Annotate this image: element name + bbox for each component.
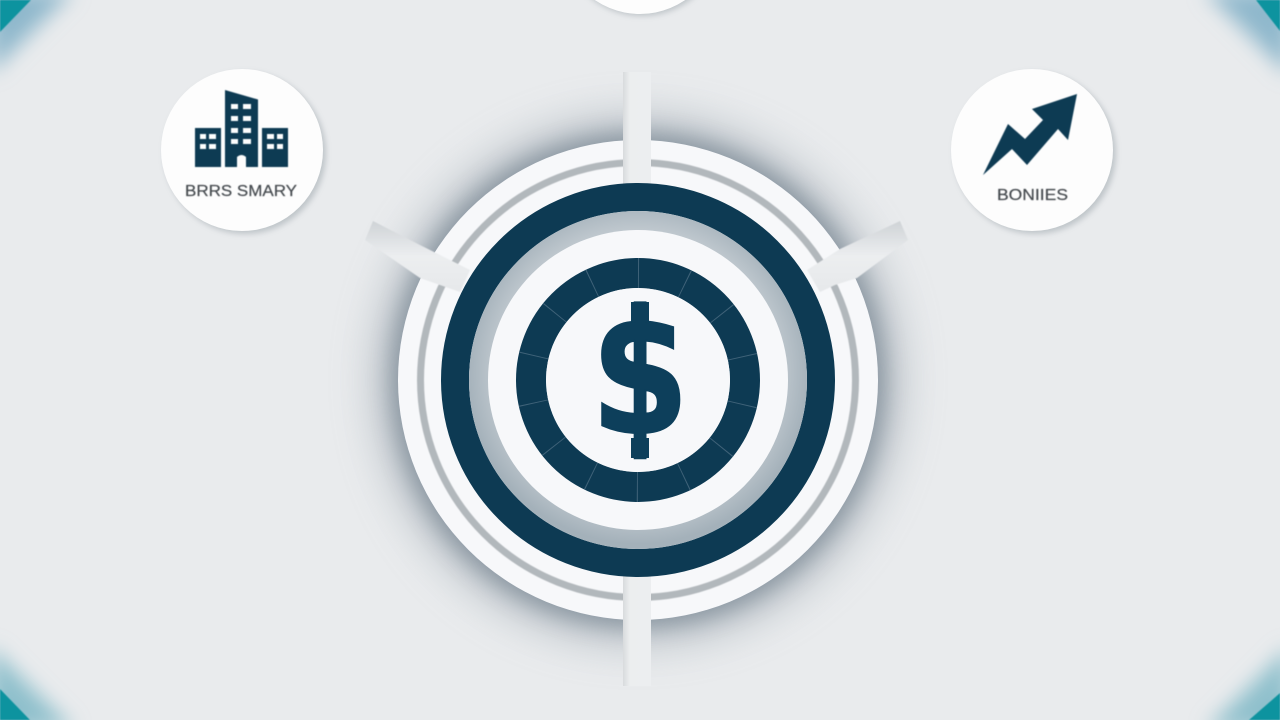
spoke: upper right <box>807 221 908 292</box>
top icon circle (cropped) <box>560 0 723 16</box>
ring tick marks <box>531 273 745 487</box>
corner accent: top right <box>1204 0 1280 76</box>
spoke: top <box>623 72 651 186</box>
thin grey groove <box>420 162 856 598</box>
label: bonuses: BONIIES <box>997 187 1068 204</box>
icon: dollar sign: $ <box>591 274 689 475</box>
icon: office buildings <box>195 90 288 167</box>
dark outer ring <box>455 197 821 563</box>
icon card: base salary <box>161 69 326 234</box>
outer white ring <box>398 140 878 620</box>
dark inner ring <box>531 273 745 487</box>
corner accent: bottom left <box>0 646 74 720</box>
spoke: bottom <box>623 574 651 686</box>
wide soft shadow <box>376 118 900 642</box>
icon card: bonuses <box>951 69 1116 234</box>
spoke: upper left <box>365 221 470 292</box>
central target dial <box>365 72 908 686</box>
grey shaded ring <box>469 211 807 549</box>
corner accent: top left <box>0 0 74 74</box>
icon: rising arrow <box>983 94 1077 175</box>
soft halo shadow <box>391 133 885 627</box>
corner accent: bottom right <box>1206 646 1280 720</box>
inner white disc <box>546 288 730 472</box>
white ring <box>488 230 788 530</box>
label: base salary: BRRS SMARY <box>185 183 297 200</box>
